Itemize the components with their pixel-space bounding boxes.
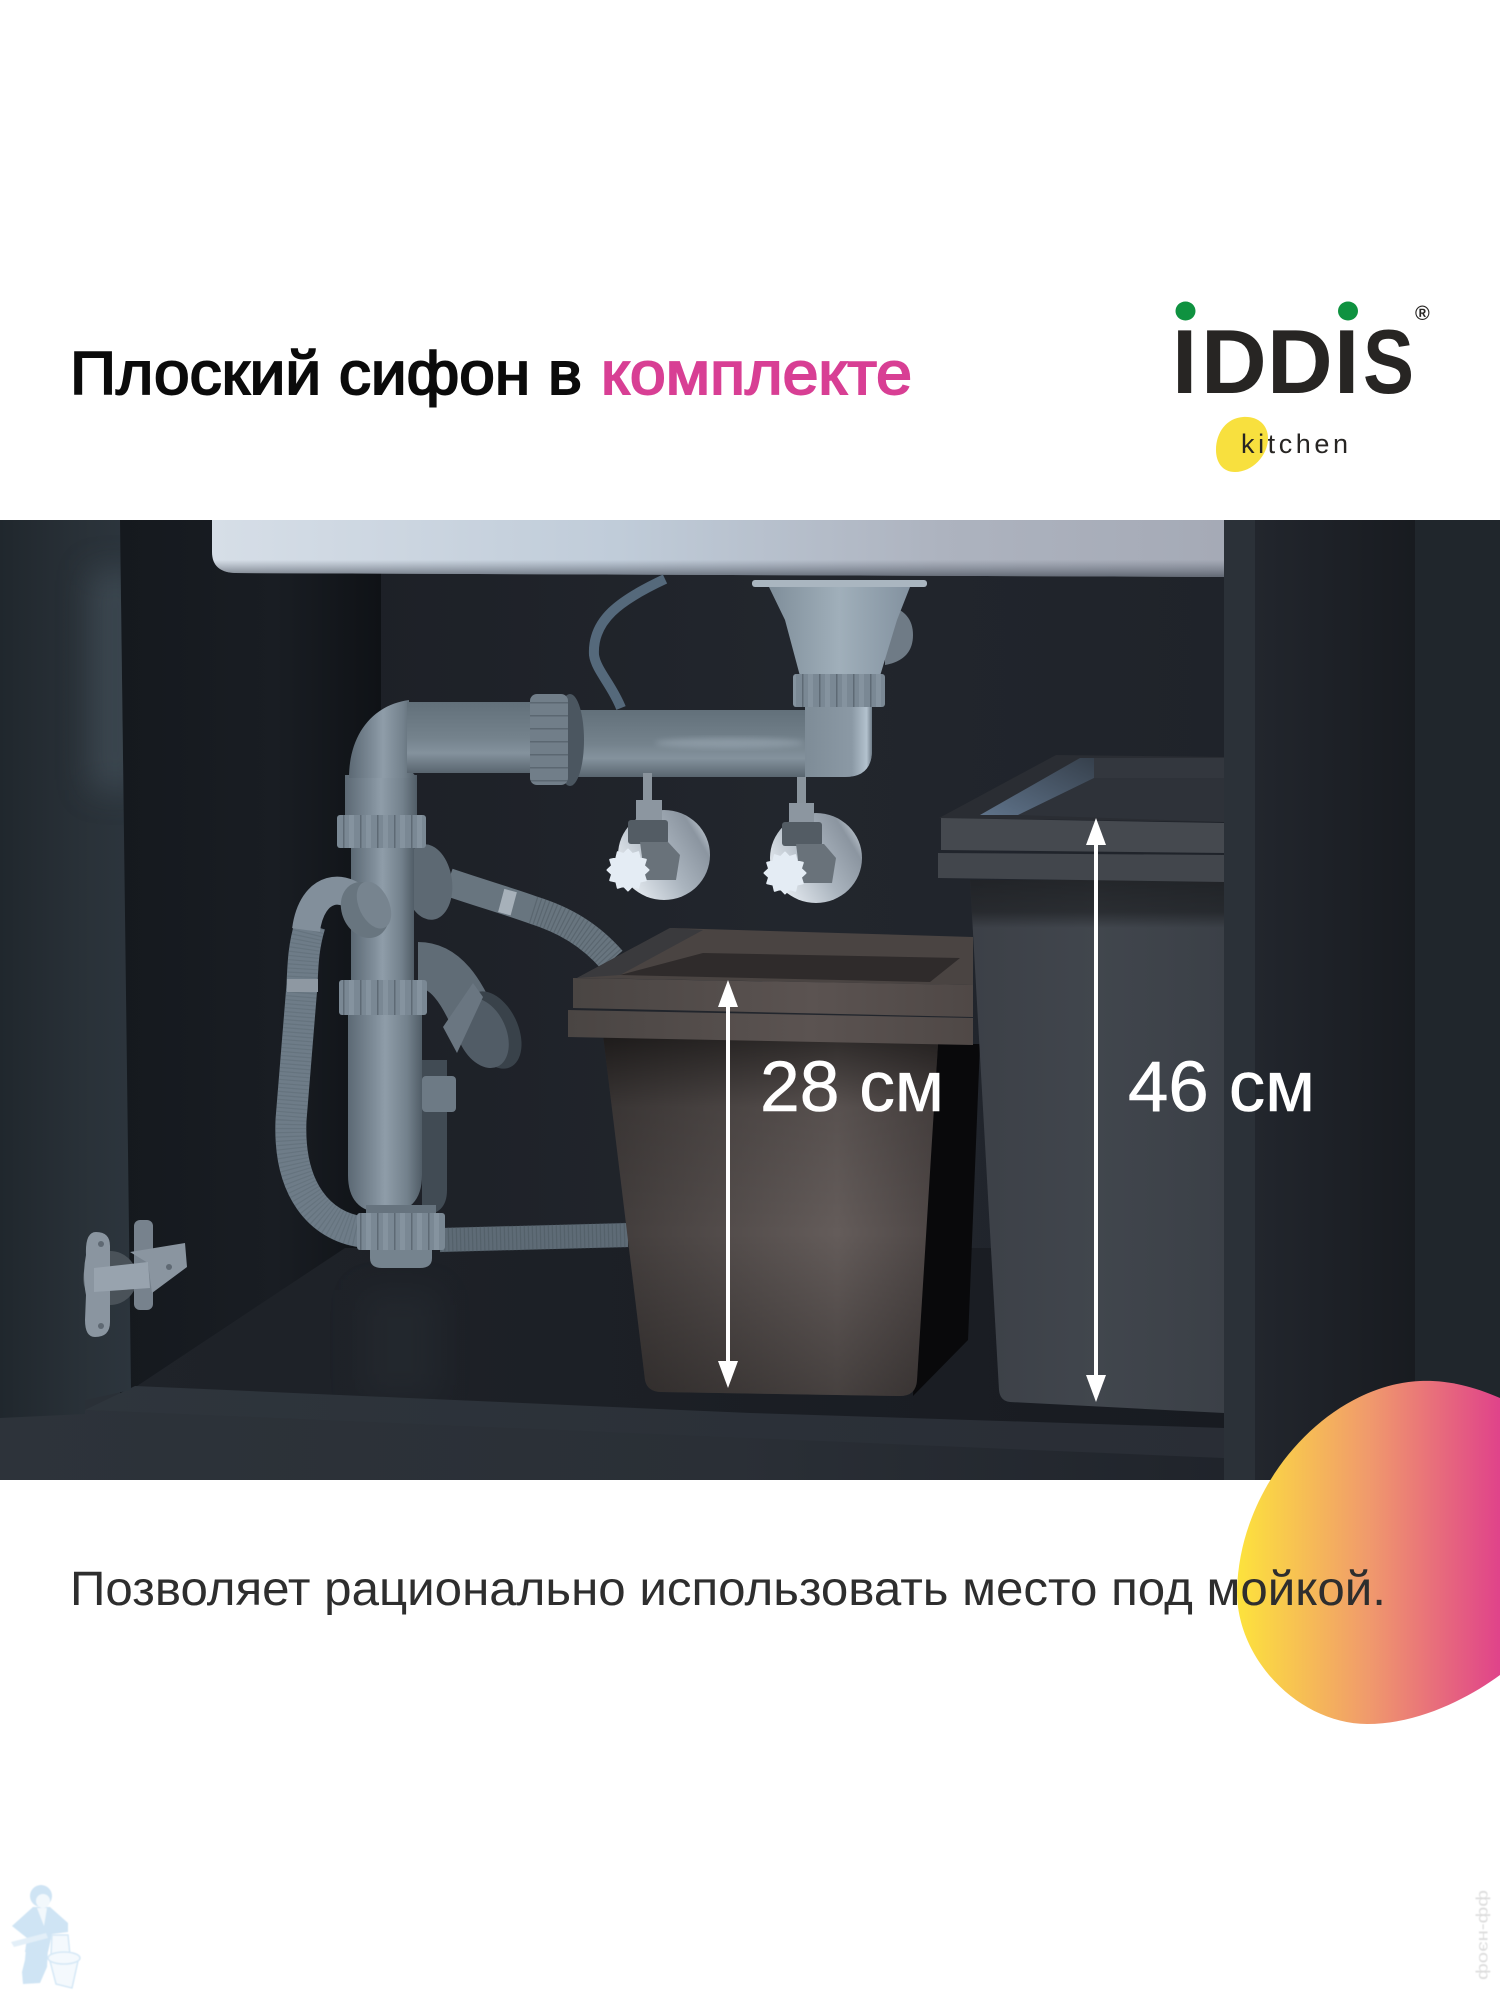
siphon horizontal pipe <box>407 694 872 786</box>
title: Плоский сифон в <box>70 340 582 407</box>
gray box lower rim <box>938 853 1224 882</box>
cabinet plinth <box>0 1410 1224 1480</box>
cabinet back wall <box>120 520 1230 1400</box>
wrench <box>11 1933 48 1947</box>
bottle lower body <box>422 1060 447 1215</box>
elbow <box>349 700 417 778</box>
brown box: 28 cm <box>568 928 973 1396</box>
hinge screws <box>98 1241 172 1329</box>
gray box lid top <box>939 755 1224 822</box>
corrugated hose: left <box>287 925 362 1232</box>
middle nut <box>339 980 427 1015</box>
elbow flange <box>332 874 398 946</box>
bottle elbow <box>418 965 478 1030</box>
sink bowl <box>212 520 1224 577</box>
valve knob <box>764 852 806 894</box>
rear bottle trap <box>418 965 533 1215</box>
dimension label: 28 cm: 28 см <box>760 1048 944 1127</box>
bottle union nut <box>443 983 483 1053</box>
angle valve: right <box>764 777 862 903</box>
bottom collar <box>366 1205 436 1217</box>
supply hose <box>594 579 665 708</box>
brown box lower rim <box>568 1010 973 1045</box>
valve knob <box>608 850 648 890</box>
door light reflection <box>86 569 124 791</box>
upper nut <box>337 815 426 848</box>
bottle lower nut <box>422 1076 456 1112</box>
dimension arrow: 28 cm <box>718 980 738 1388</box>
hinge box <box>130 1243 187 1293</box>
photo: under-sink cabinet <box>0 520 1500 1480</box>
logo: IDDIS kitchen <box>1172 302 1430 472</box>
dimension label: 46 cm: 46 см <box>1128 1048 1315 1127</box>
hinge cup <box>83 1251 137 1305</box>
brown box lid top <box>577 928 973 985</box>
cabinet left inner wall <box>120 520 381 1400</box>
pipe vertical turn <box>805 707 872 777</box>
hose clamp <box>498 889 517 915</box>
union nut <box>530 694 568 785</box>
bottle cap gear <box>453 982 533 1078</box>
angle valve: left <box>608 773 710 900</box>
watermark: vertical site name: фф-нэоф <box>1475 1890 1492 1980</box>
right cabinet panels <box>1224 520 1500 1480</box>
plumber legs <box>22 1948 48 1984</box>
cabinet floor <box>131 1248 1224 1430</box>
logo green dots <box>1176 302 1358 320</box>
hinge back plate <box>134 1220 153 1310</box>
door hinge <box>83 1220 187 1337</box>
gray box: 46 cm <box>938 755 1224 1413</box>
brown box upper rim <box>573 978 973 1017</box>
shelf front edge <box>85 1386 1224 1458</box>
logo wordmark: IDDI <box>1172 312 1359 413</box>
gray box upper rim <box>941 818 1224 853</box>
siphon vertical pipe <box>337 700 445 1268</box>
pipe highlight <box>655 738 805 748</box>
title <box>70 340 912 407</box>
registered mark: ® <box>1415 303 1430 325</box>
drain nut <box>793 674 885 707</box>
body text: Позволяет рационально использовать место под мойкой. <box>70 1563 1386 1616</box>
cabinet door <box>0 520 131 1418</box>
left hose elbow <box>306 874 398 946</box>
toilet <box>48 1935 80 1988</box>
title: комплекте <box>601 340 912 407</box>
shadow between boxes <box>913 1044 980 1396</box>
hose clamp <box>287 979 318 992</box>
bottom cap <box>370 1250 432 1268</box>
hinge mounting plate <box>84 1232 110 1337</box>
upper socket <box>345 775 417 815</box>
plumber head <box>30 1885 52 1908</box>
photo base <box>0 520 1500 1480</box>
bottom nut <box>357 1213 445 1250</box>
plumber shirt <box>37 1908 47 1926</box>
hinge arm <box>94 1262 150 1292</box>
plumber jacket <box>12 1907 68 1952</box>
union nut rim <box>556 694 584 786</box>
right side fitting <box>399 841 457 923</box>
logo wordmark: S <box>1363 311 1414 412</box>
logo yellow spot <box>1216 417 1268 472</box>
gray box body <box>970 880 1224 1413</box>
corrugated hose: bottom <box>440 1223 628 1252</box>
dimension arrow: 46 cm <box>1086 818 1106 1402</box>
brown box body <box>603 1035 938 1396</box>
corrugated hose: right <box>448 882 612 960</box>
bottle cap cylinder <box>445 989 519 1077</box>
gradient blob <box>1237 1381 1500 1724</box>
logo subtitle: kitchen <box>1241 429 1348 459</box>
sink drain cone <box>752 580 927 707</box>
watermark: plumber figure <box>11 1885 80 1988</box>
floor reflection <box>360 1290 440 1400</box>
